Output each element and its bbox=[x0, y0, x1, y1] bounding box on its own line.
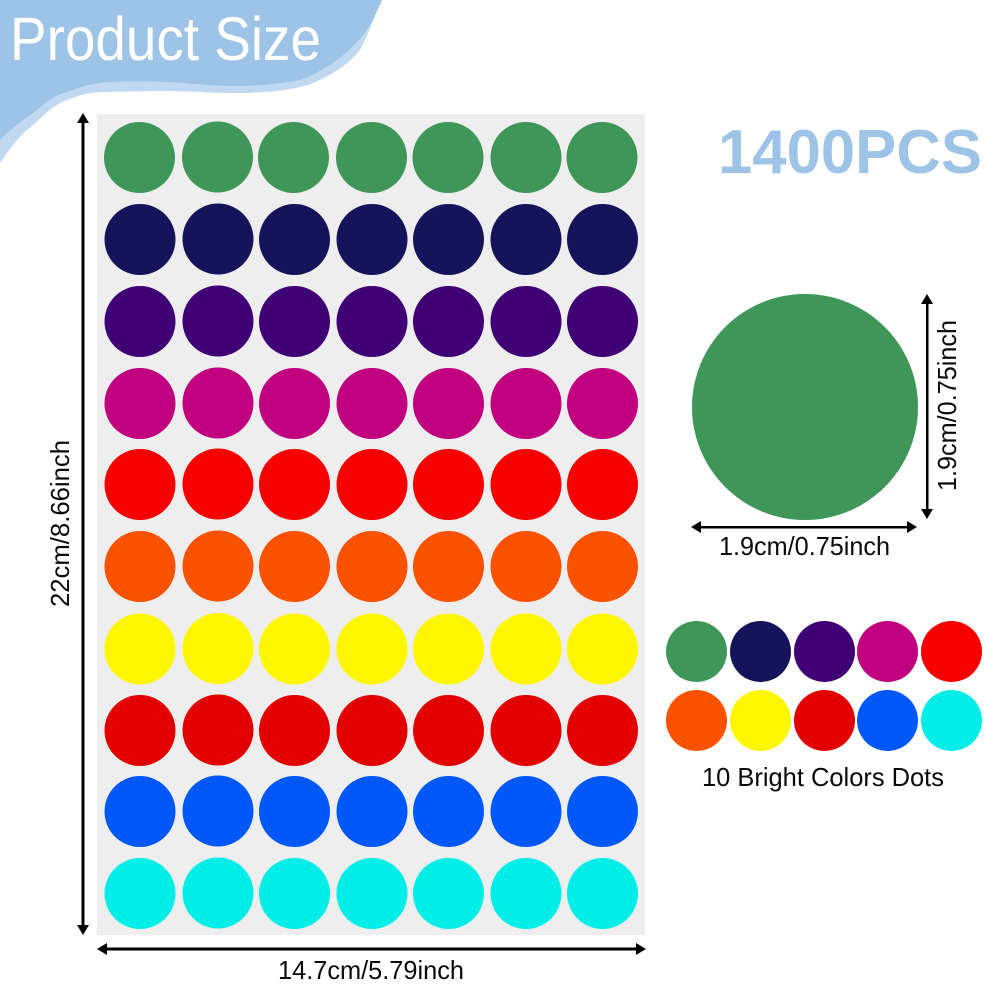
header banner bbox=[0, 0, 382, 163]
single dot bbox=[692, 294, 918, 520]
row: blue dots bbox=[104, 776, 638, 847]
row: cyan dots bbox=[104, 858, 638, 929]
label: dot height: 1.9cm/0.75inch bbox=[932, 320, 962, 491]
row: purple dots bbox=[104, 286, 638, 357]
arrow: sheet height bbox=[77, 113, 89, 935]
sheet background bbox=[97, 114, 645, 935]
swatch row 1 bbox=[666, 621, 982, 682]
colour swatches bbox=[666, 621, 982, 751]
arrow: dot height bbox=[921, 294, 933, 519]
label: dot width: 1.9cm/0.75inch bbox=[719, 531, 890, 561]
row: navy dots bbox=[104, 204, 638, 275]
sticker sheet bbox=[97, 114, 645, 935]
row: orange dots bbox=[104, 530, 638, 602]
arrow: dot width bbox=[691, 521, 917, 533]
row: dark red dots bbox=[104, 694, 638, 766]
label: sheet width: 14.7cm/5.79inch bbox=[278, 955, 464, 985]
quantity heading: 1400PCS bbox=[718, 118, 982, 187]
swatch caption: 10 Bright Colors Dots bbox=[702, 762, 944, 792]
row: yellow dots bbox=[104, 613, 638, 684]
row: red dots bbox=[104, 448, 638, 520]
row: green dots bbox=[104, 122, 638, 193]
title: Product Size bbox=[10, 5, 321, 73]
swatch row 2 bbox=[666, 690, 982, 751]
label: sheet height: 22cm/8.66inch bbox=[45, 440, 75, 607]
row: magenta dots bbox=[104, 368, 638, 439]
arrow: sheet width bbox=[97, 943, 646, 955]
